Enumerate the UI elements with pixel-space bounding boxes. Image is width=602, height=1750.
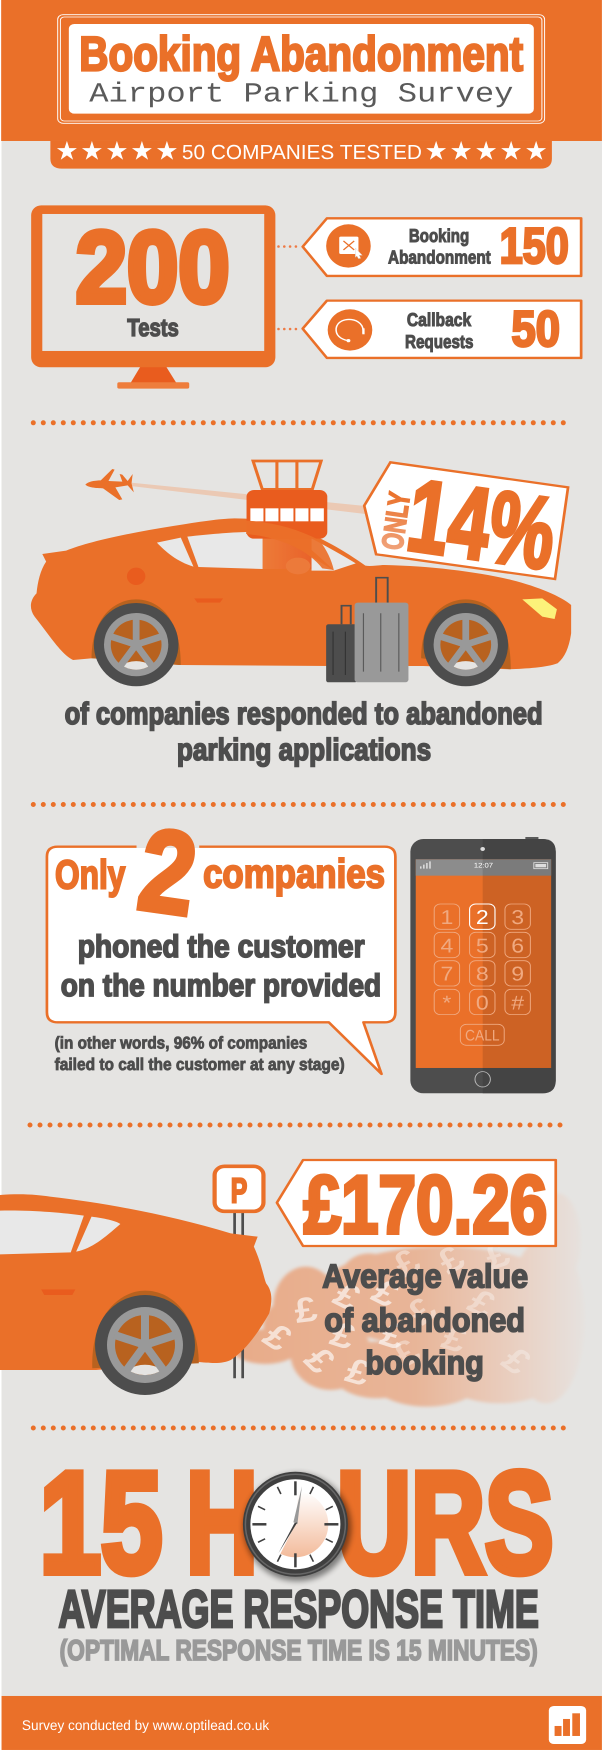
money cloud: [231, 1193, 585, 1407]
number 200: 200: [76, 211, 230, 324]
side marker: [194, 598, 223, 603]
caption: average value: Average value: [322, 1257, 528, 1295]
caption: average value: [322, 1257, 528, 1381]
pound signs: £: [340, 1351, 376, 1394]
headline: 15 hours: 15: [40, 1443, 162, 1603]
home button: [475, 1072, 490, 1087]
pound signs: £: [461, 1281, 503, 1325]
label tests: Tests: [127, 314, 179, 341]
ribbon: 50 companies tested: 50 COMPANIES TESTED: [182, 141, 422, 163]
pound signs: £: [386, 1241, 428, 1285]
note: 96% failed: [55, 1033, 345, 1074]
rear of car: [0, 1194, 271, 1395]
footer: Survey conducted by www.optilead.co.uk: [22, 1717, 270, 1733]
headline: 15 hours: H: [186, 1443, 258, 1603]
logo: [549, 1706, 586, 1744]
keypad: [434, 904, 530, 1045]
tag: callback requests 50: Requests: [405, 331, 473, 352]
pound signs: £: [430, 1238, 472, 1281]
phone screen: [416, 859, 551, 1068]
pound signs: £: [255, 1316, 300, 1359]
tag: callback requests 50: 50: [512, 300, 560, 357]
tag: booking abandonment 150: Booking: [409, 225, 469, 246]
front wheel: [421, 599, 511, 686]
speech bubble: only 2 companies: phoned the customer: [78, 928, 365, 963]
phone screen: 12:07: [474, 862, 493, 869]
pound signs: £: [296, 1340, 344, 1381]
keypad: 1: [440, 906, 453, 928]
pound signs: £: [325, 1314, 361, 1357]
keypad: 8: [476, 963, 489, 985]
keypad: 7: [440, 963, 453, 985]
phone: [410, 837, 556, 1093]
header panel: [1, 0, 602, 141]
mirror: [286, 558, 310, 574]
car with tower: [31, 461, 571, 686]
roof line: [246, 521, 334, 570]
rear wheel: [92, 599, 181, 686]
trail: [131, 483, 365, 514]
speech bubble: only 2 companies: on the number provided: [61, 968, 381, 1003]
monitor: 200 tests: [31, 205, 275, 389]
keypad: 2: [476, 906, 489, 928]
tag: booking abandonment 150: 150: [500, 217, 569, 274]
keypad: 0: [476, 991, 489, 1014]
connector dots: [278, 246, 298, 329]
pound signs: £: [479, 1234, 515, 1277]
keypad: 3: [511, 906, 524, 928]
speech bubble: only 2 companies: [47, 843, 395, 1074]
pound signs: £: [436, 1317, 473, 1361]
pound signs: £: [326, 1275, 368, 1318]
tag: booking abandonment 150: Abandonment: [388, 246, 491, 267]
pound signs: £: [292, 1289, 320, 1331]
icon: abandoned form: [326, 224, 371, 268]
ribbon: 50 companies tested: [50, 141, 552, 169]
icon: plane: [85, 469, 134, 500]
car body: [31, 518, 571, 669]
speech bubble: only 2 companies: Only: [55, 852, 125, 897]
speech bubble: only 2 companies: companies: [203, 851, 385, 896]
keypad: 6: [511, 934, 524, 957]
caption: companies responded: parking applications: [177, 733, 431, 767]
tag: callback requests 50: Callback: [407, 309, 471, 330]
caption: average value: of abandoned: [324, 1301, 525, 1339]
pound signs: £: [386, 1331, 428, 1375]
footer: [2, 1696, 602, 1750]
pound signs: £: [493, 1340, 540, 1382]
fuel cap: [127, 568, 145, 585]
icon: clock: [243, 1472, 351, 1581]
car windows: [157, 532, 356, 571]
pound signs: £: [365, 1271, 407, 1315]
caption: average value: booking: [365, 1344, 484, 1381]
small suitcase: [326, 606, 357, 682]
keypad: #: [511, 991, 524, 1014]
caption: companies responded: [65, 697, 543, 767]
big number 2: 2: [132, 803, 204, 940]
subtitle: Airport Parking Survey: [89, 79, 513, 110]
control tower: [247, 461, 327, 569]
pound signs: [255, 1234, 540, 1394]
keypad: 4: [440, 934, 453, 957]
keypad: *: [442, 991, 451, 1014]
headline: 15 hours: [40, 1443, 553, 1603]
headlight: [522, 598, 557, 619]
pound signs: £: [375, 1314, 411, 1357]
keypad: 5: [476, 934, 489, 957]
keypad: 9: [511, 963, 524, 985]
icon: headset: [328, 309, 372, 351]
pound signs: £: [399, 1290, 445, 1332]
note: 96% failed: (in other words, 96% of companies: [55, 1033, 307, 1052]
parking sign: P: [231, 1171, 247, 1210]
note: 96% failed: failed to call the customer at any stage): [55, 1055, 345, 1074]
tag: only 14%: ONLY: [376, 490, 417, 552]
tag: only 14%: [364, 458, 568, 591]
keypad: CALL: [465, 1027, 500, 1044]
parking sign: [215, 1166, 263, 1378]
large suitcase: [355, 578, 408, 682]
tag: callback requests 50: [303, 300, 581, 358]
tag: booking abandonment 150: [303, 217, 581, 276]
